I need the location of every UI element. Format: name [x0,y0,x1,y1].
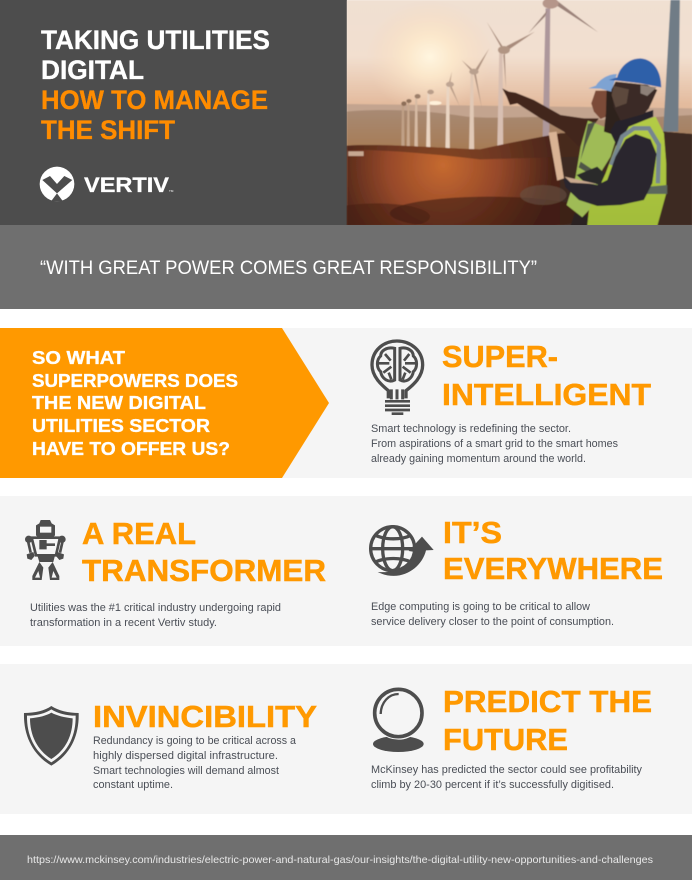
logo: Vertiv [38,167,174,201]
arrow callout: SO WHAT [32,347,126,368]
heading [442,340,651,412]
icon: robot [25,520,66,580]
logo: Vertiv: TM [169,189,174,193]
logo: Vertiv: VERTIV [84,174,169,197]
heading: A REAL [82,517,196,551]
heading [82,517,326,588]
heading: FUTURE [443,723,568,757]
icon: crystal ball [373,689,424,752]
quote band: “WITH GREAT POWER COMES GREAT RESPONSIBILITY” [40,258,537,279]
footer source link [0,835,692,880]
hand [577,167,605,185]
body text [93,735,297,791]
people [502,58,667,226]
right tower [663,0,680,132]
body text [30,602,281,629]
foreground hillside [347,132,692,226]
arrow callout: UTILITIES SECTOR [32,415,210,436]
body text: constant uptime. [93,779,173,791]
turbines [401,0,598,160]
body text: Smart technology is redefining the sector. [371,423,571,435]
title: THE SHIFT [41,115,175,145]
heading: INVINCIBILITY [93,700,317,734]
body text: transformation in a recent Vertiv study. [30,617,217,629]
arrow callout [0,328,329,478]
arrow callout: SUPERPOWERS DOES [32,370,238,391]
body text: McKinsey has predicted the sector could see profitability [371,764,642,776]
woman: lower body [570,214,588,225]
panel: row 3 [0,664,692,814]
heading: SUPER- [442,340,558,374]
heading: EVERYWHERE [443,552,663,586]
footer source link: https://www.mckinsey.com/industries/electric-power-and-natural-gas/our-insights/the-digital-utility-new-opportunities-and-challenges [27,854,653,866]
title: HOW TO MANAGE [41,85,268,115]
body text: From aspirations of a smart grid to the smart homes [371,438,618,450]
photo: engineers and wind turbines at sunset [323,0,692,230]
man: sleeve [563,134,657,206]
body text: Edge computing is going to be critical to allow [371,601,590,613]
woman: pointing arm [502,88,600,134]
woman: helmet [588,74,617,92]
woman: face and hair [590,90,608,120]
heading: INTELLIGENT [442,378,651,412]
heading: IT’S [443,516,502,550]
body text: service delivery closer to the point of consumption. [371,616,614,628]
body text [371,423,618,465]
heading: PREDICT THE [443,685,652,719]
header panel [0,0,347,225]
arrow callout: HAVE TO OFFER US? [32,438,230,459]
icon: globe with arrow [371,527,434,576]
man: collar, neck, head [610,110,653,147]
panel: row 2 [0,496,692,646]
body text: already gaining momentum around the world. [371,453,586,465]
woman: vest [567,121,617,217]
panel: superpowers intro and super-intelligent [0,328,692,478]
heading: TRANSFORMER [82,554,326,588]
title: DIGITAL [41,55,144,85]
man: vest [587,117,666,226]
icon: brain light bulb [372,341,423,414]
laptop [549,132,564,181]
heading [443,685,652,757]
body text [371,601,614,628]
arrow callout: THE NEW DIGITAL [32,392,206,413]
man: reflective strap [611,128,659,183]
man: helmet [609,58,661,87]
body text [371,764,642,791]
title: TAKING UTILITIES [41,25,270,55]
body text: highly dispersed digital infrastructure. [93,750,278,762]
body text: Redundancy is going to be critical across a [93,735,297,747]
body text: Smart technologies will demand almost [93,765,279,777]
body text: climb by 20-30 percent if it’s successfully digitised. [371,779,614,791]
heading [443,516,663,586]
title [41,25,270,145]
quote band [0,225,692,309]
body text: Utilities was the #1 critical industry undergoing rapid [30,602,281,614]
icon: shield [24,706,79,766]
